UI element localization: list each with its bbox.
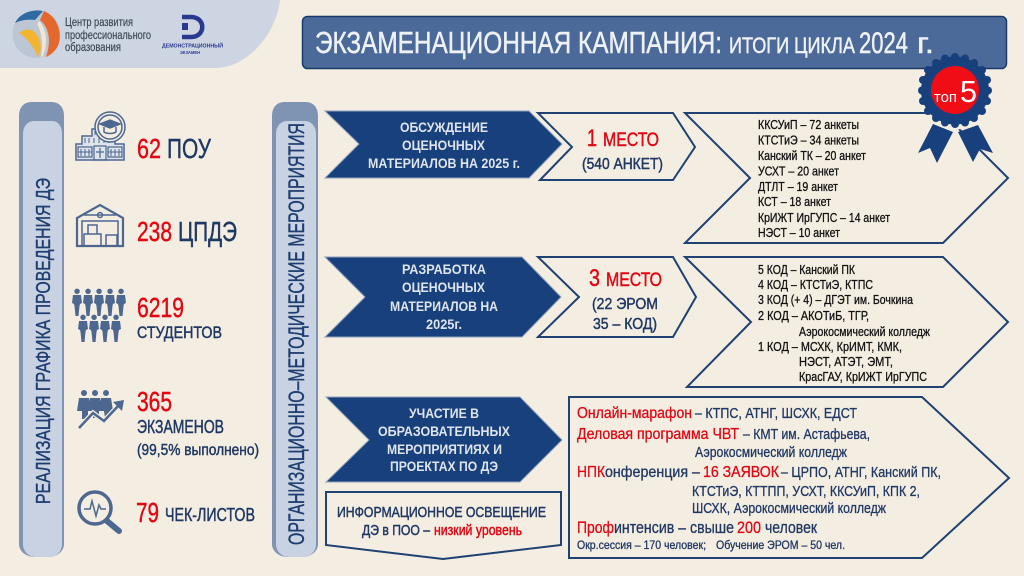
panel: events detail: человек (765, 518, 817, 537)
arrow: development of assessment materials (325, 257, 561, 337)
panel: events detail: НПК (577, 464, 606, 481)
panel: events detail: ШСХК, Аэрокосмический колледж (692, 500, 886, 517)
panel: events detail: Онлайн-марафон (577, 405, 692, 422)
arrow: codes list (685, 257, 1008, 387)
arrow: questionnaire list: ККСУиП – 72 анкеты (758, 117, 859, 132)
badge: top 5: 5 (960, 74, 977, 109)
arrow: participation in events: ПРОЕКТАХ ПО ДЭ (390, 459, 498, 474)
logo text: образования (65, 42, 121, 54)
arrow: development of assessment materials: МАТЕРИАЛОВ НА (390, 299, 498, 314)
badge: top 5 (918, 53, 993, 163)
arrow: third place (538, 257, 696, 337)
stat: 6219 students: СТУДЕНТОВ (137, 324, 222, 342)
stat: 365 exams: 365 (137, 386, 172, 417)
callout: information coverage: низкий уровень (434, 523, 522, 539)
panel: events detail: Аэрокосмический колледж (695, 444, 847, 461)
title banner: 2024 (859, 27, 908, 60)
title banner: ИТОГИ ЦИКЛА (729, 33, 855, 58)
arrow: questionnaire list: НЭСТ – 10 анкет (758, 225, 840, 240)
callout: information coverage: ИНФОРМАЦИОННОЕ ОСВЕЩЕНИЕ (337, 505, 546, 521)
badge: top 5: топ (934, 89, 957, 106)
arrow: codes list: 1 КОД – МСХК, КрИМТ, КМК, (758, 339, 902, 354)
title banner: г. (917, 27, 934, 60)
header band with logos (0, 0, 280, 68)
arrow: questionnaire list: КСТ – 18 анкет (758, 194, 831, 209)
stat: 238 ЦПДЭ: 238 (137, 216, 172, 247)
icon: warehouse (77, 205, 123, 246)
arrow: participation in events: УЧАСТИЕ В (409, 406, 479, 421)
callout: information coverage (326, 492, 561, 559)
panel: events detail: КТСТиЭ, КТТПП, УСХТ, ККСУиП, КПК 2, (692, 483, 920, 500)
icon: college building (76, 112, 125, 160)
panel: events detail (569, 397, 1009, 558)
icon: students (72, 289, 126, 342)
panel: events detail: – КМТ им. Астафьева, (743, 426, 870, 443)
arrow: third place: 3 (589, 265, 600, 292)
arrow: codes list: 3 КОД (+ 4) – ДГЭТ им. Бочкина (758, 292, 914, 307)
stat: 365 exams: ЭКЗАМЕНОВ (137, 417, 224, 437)
stat: 365 exams (137, 386, 259, 459)
arrow: development of assessment materials: 2025г. (426, 317, 462, 332)
title banner (302, 16, 1006, 68)
panel: right pillar (272, 102, 318, 557)
arrow: third place: (22 ЭРОМ (592, 296, 658, 313)
panel: events detail: Окр.сессия – 170 человек; (577, 538, 706, 552)
arrow: codes list: 4 КОД – КТСТиЭ, КТПС (758, 277, 873, 292)
arrow: third place: 35 – КОД) (593, 316, 657, 333)
logo: demonstration exam: ЭКЗАМЕН (180, 50, 200, 55)
arrow: questionnaire list: УСХТ – 20 анкет (758, 164, 839, 178)
panel: left pillar (19, 102, 64, 557)
logo text (65, 17, 151, 54)
panel: left pillar: РЕАЛИЗАЦИЯ ГРАФИКА ПРОВЕДЕНИЯ ДЭ (32, 178, 55, 504)
stat: 6219 students (137, 292, 222, 342)
stat: 238 ЦПДЭ (137, 216, 237, 247)
arrow: questionnaire list: Канский ТК – 20 анкет (758, 148, 866, 163)
arrow: first place: (540 АНКЕТ) (582, 156, 663, 173)
arrow: third place: МЕСТО (606, 270, 662, 291)
logo text: профессионального (65, 30, 151, 42)
panel: events detail: Обучение ЭРОМ – 50 чел. (716, 538, 845, 552)
stat: 6219 students: 6219 (137, 292, 184, 323)
icon: magnifier (79, 492, 119, 531)
arrow: first place: МЕСТО (603, 130, 659, 151)
arrow: participation in events: МЕРОПРИЯТИЯХ И (387, 442, 502, 457)
icon: exam growth (77, 390, 124, 428)
arrow: discussion of assessment materials: ОЦЕНОЧНЫХ (402, 138, 485, 153)
stat: 62 ПОУ: 62 (137, 133, 161, 164)
arrow: questionnaire list: КТСТиЭ – 34 анкеты (758, 132, 859, 148)
arrow: codes list: КрасГАУ, КрИЖТ ИрГУПС (799, 369, 927, 384)
arrow: codes list: Аэрокосмический колледж (799, 324, 930, 339)
panel: events detail: – ЦРПО, АТНГ, Канский ПК, (781, 464, 941, 481)
stat: 79 checklists: 79 (136, 497, 159, 528)
stat: 238 ЦПДЭ: ЦПДЭ (178, 216, 237, 247)
arrow: codes list: 5 КОД – Канский ПК (758, 262, 855, 277)
arrow: development of assessment materials: РАЗРАБОТКА (402, 262, 486, 277)
stat: 62 ПОУ: ПОУ (167, 133, 211, 164)
logo text: Центр развития (65, 17, 133, 29)
arrow: discussion of assessment materials (325, 111, 562, 178)
panel: events detail: Проф (577, 518, 614, 537)
arrow: participation in events (326, 397, 562, 482)
panel: events detail: 16 ЗАЯВОК (703, 464, 780, 481)
panel: events detail: 200 (737, 518, 761, 537)
panel: events detail: онференция – (605, 464, 700, 481)
arrow: first place (538, 113, 695, 180)
stat: 79 checklists (136, 497, 255, 528)
arrow: development of assessment materials: ОЦЕНОЧНЫХ (402, 280, 485, 295)
panel: events detail: Деловая программа ЧВТ (577, 426, 739, 443)
panel: events detail: – КТПС, АТНГ, ШСХК, ЕДСТ (695, 405, 857, 422)
callout: information coverage: ДЭ в ПОО – (362, 523, 431, 539)
arrow: discussion of assessment materials: МАТЕРИАЛОВ НА 2025 г. (368, 156, 520, 171)
arrow: codes list: 2 КОД – АКОТиБ, ТГР, (758, 308, 869, 323)
panel: events detail: интенсив – свыше (614, 518, 734, 537)
arrow: questionnaire list: КрИЖТ ИрГУПС – 14 анкет (758, 210, 890, 225)
stat: 365 exams: (99,5% выполнено) (137, 442, 259, 459)
stat: 62 ПОУ (137, 133, 211, 164)
arrow: questionnaire list (685, 113, 1008, 243)
logo: vocational education centre (12, 10, 60, 58)
arrow: codes list: НЭСТ, АТЭТ, ЭМТ, (799, 354, 893, 369)
arrow: participation in events: ОБРАЗОВАТЕЛЬНЫХ (378, 424, 510, 439)
logo: demonstration exam (162, 17, 223, 55)
arrow: questionnaire list: ДТЛТ – 19 анкет (758, 179, 838, 194)
logo: demonstration exam: ДЕМОНСТРАЦИОННЫЙ (162, 42, 223, 50)
title banner: ЭКЗАМЕНАЦИОННАЯ КАМПАНИЯ: (315, 26, 722, 60)
stat: 79 checklists: ЧЕК-ЛИСТОВ (165, 505, 255, 525)
arrow: discussion of assessment materials: ОБСУЖДЕНИЕ (400, 120, 488, 135)
arrow: first place: 1 (587, 125, 597, 152)
